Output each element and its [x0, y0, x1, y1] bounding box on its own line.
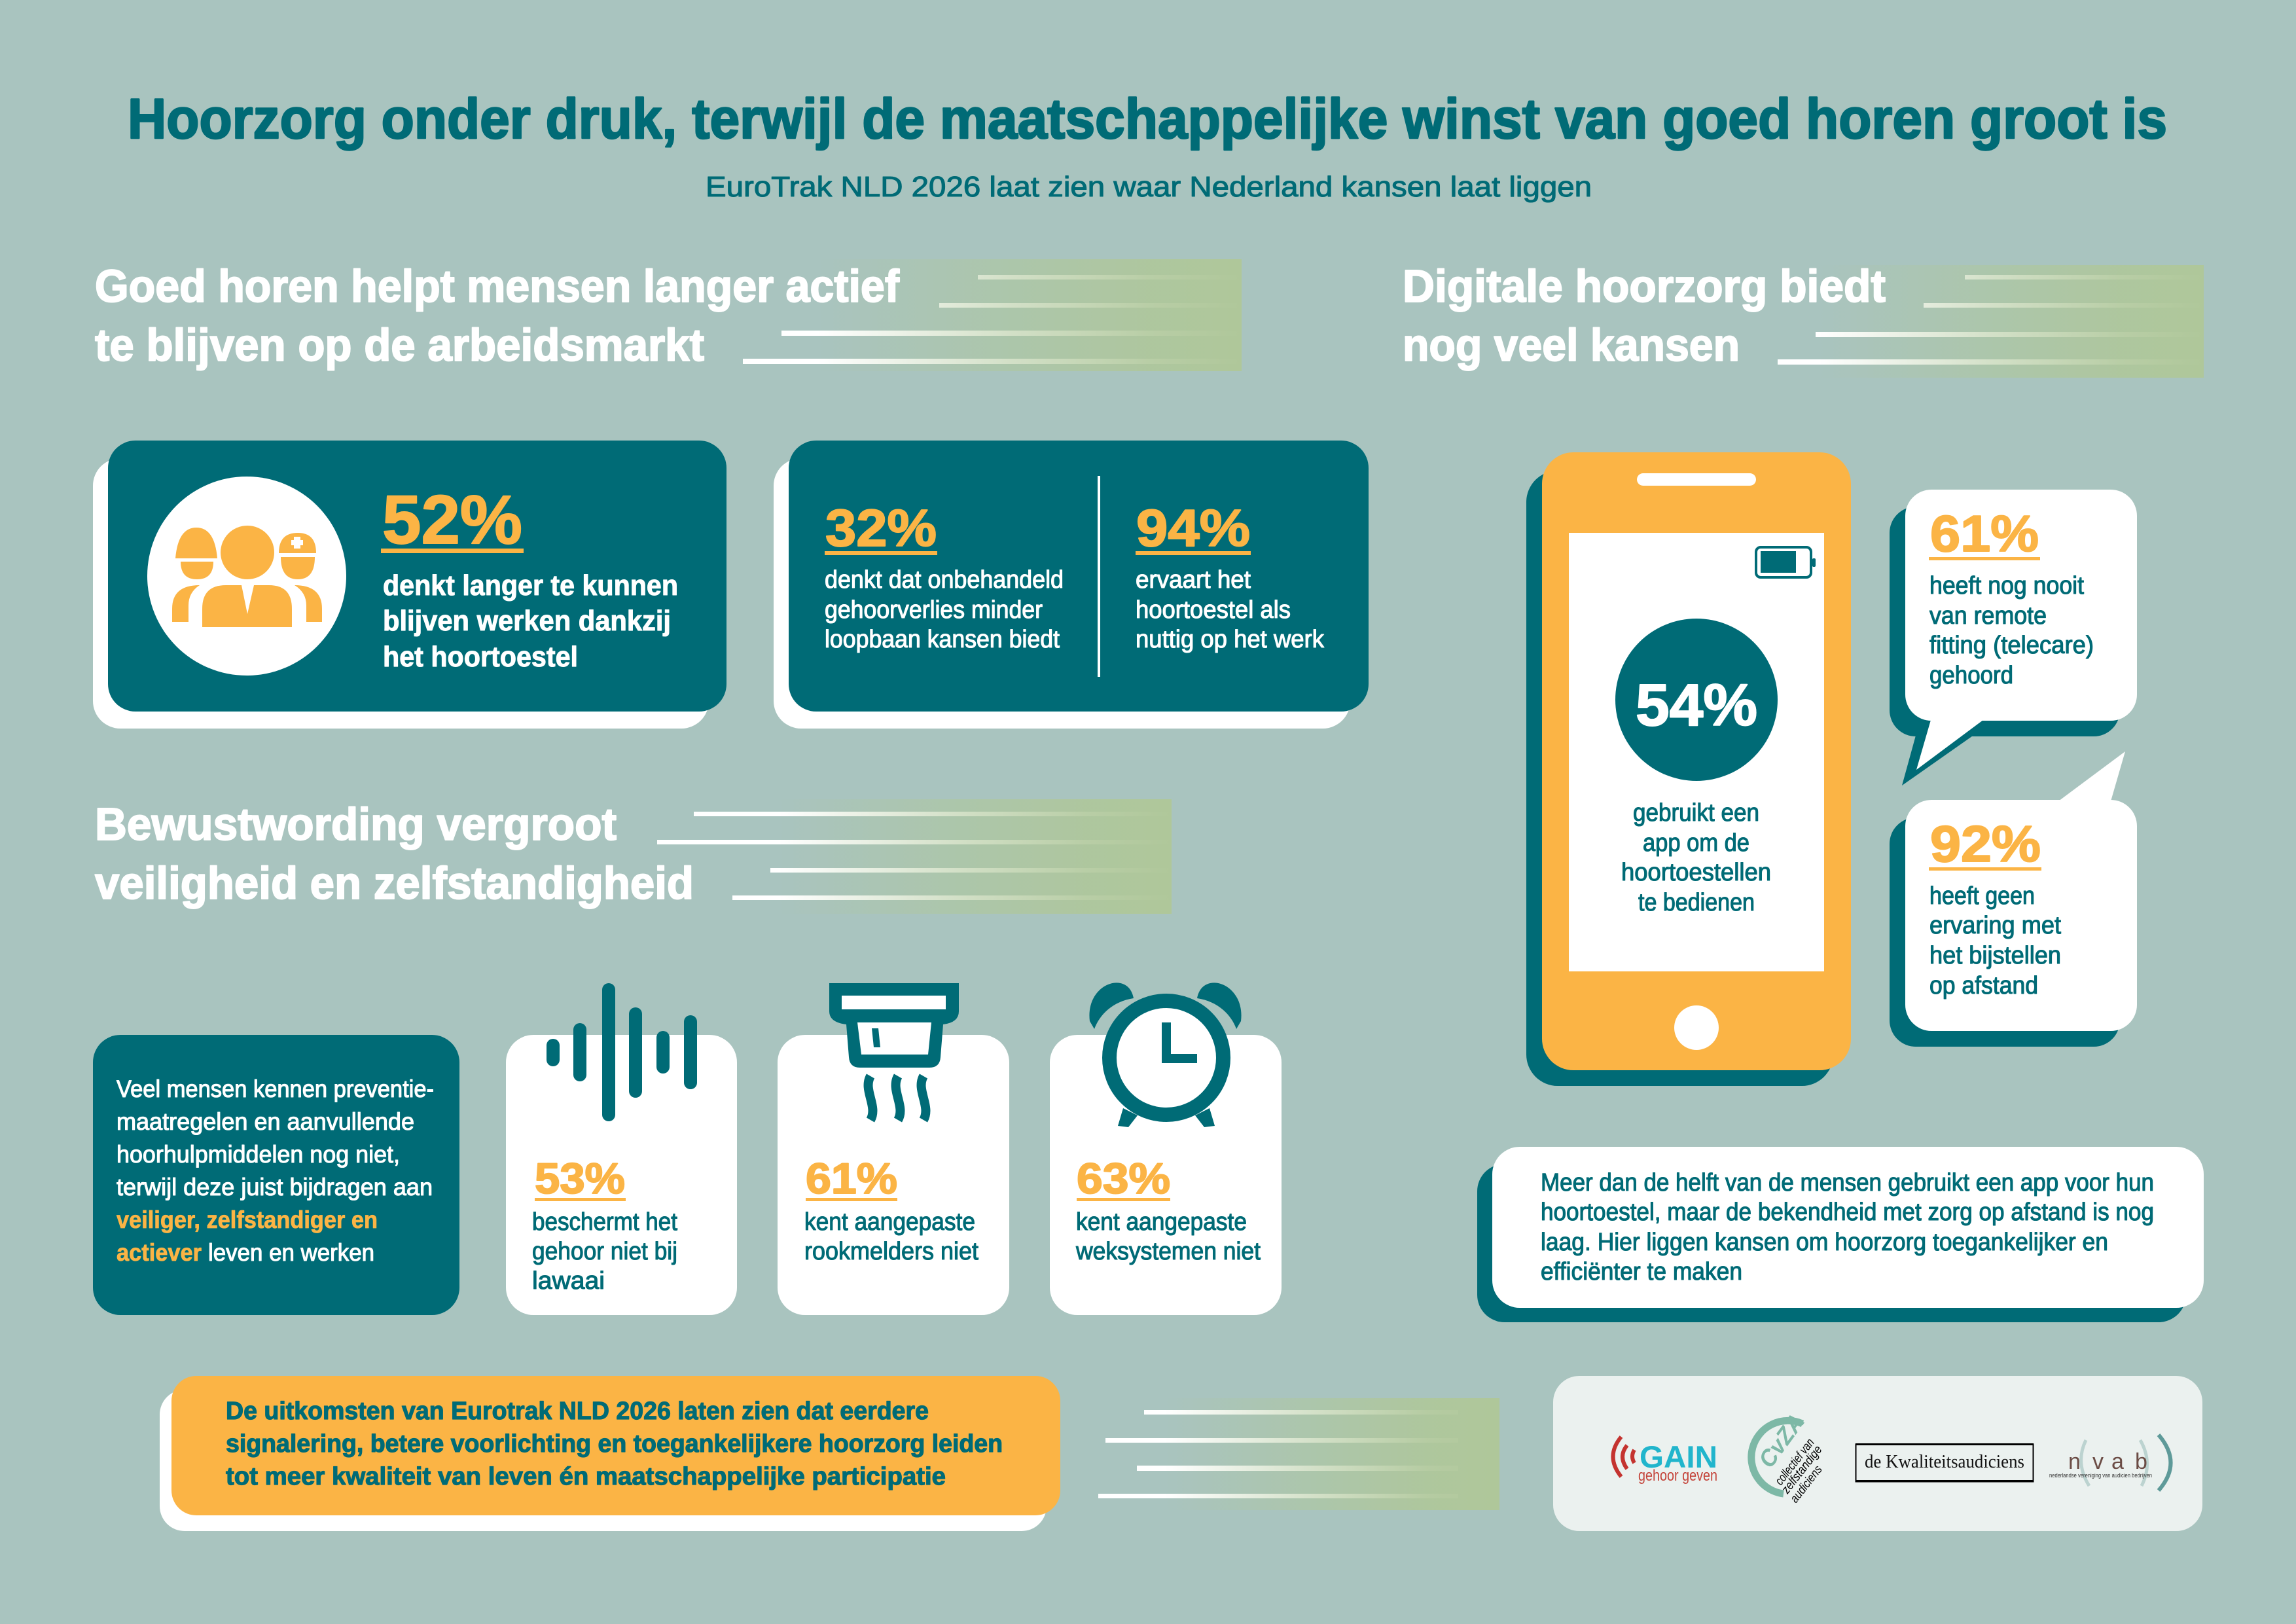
text: beschermt	[532, 1208, 677, 1295]
panel: app samenvatting: efficiënter te maken	[1541, 1258, 1742, 1286]
logo: de Kwaliteitsaudiciens: de Kwaliteitsaudiciens	[1865, 1452, 2024, 1472]
text: bijstellen: ervaring met	[1929, 912, 2061, 939]
text: langer werken: het hoortoestel	[383, 641, 578, 673]
panel: 61% rookmelders	[778, 983, 1009, 1315]
subtitle: EuroTrak NLD 2026 laat zien waar Nederland kansen laat liggen	[706, 171, 1592, 203]
icon: batterij	[1756, 547, 1816, 577]
accent: strepen conclusie	[1098, 1398, 1499, 1510]
heading: digitale hoorzorg	[1403, 261, 2204, 378]
text: app gebruik: gebruikt een	[1633, 799, 1759, 827]
panel: 63% weksystemen	[1050, 983, 1282, 1315]
logo: CvZA: CvZA	[1753, 1409, 1810, 1473]
panel: conclusie: tot meer kwaliteit van leven én maatschappelijke participatie	[226, 1463, 946, 1490]
logo: nvab: n	[2068, 1449, 2081, 1474]
text: app gebruik: app om de	[1643, 829, 1749, 857]
text: rookmelders	[804, 1208, 978, 1265]
panel: app samenvatting: laag. Hier liggen kansen om hoorzorg toegankelijker en	[1541, 1229, 2108, 1256]
stat: 32%: 32%	[825, 499, 937, 557]
stat: 61%: 61%	[806, 1154, 897, 1202]
text: langer werken: denkt langer te kunnen	[383, 569, 678, 602]
title: Hoorzorg onder druk, terwijl de maatschappelijke winst van goed horen groot is	[128, 88, 2167, 151]
text: weksystemen: kent aangepaste	[1076, 1208, 1247, 1236]
logo: CvZA: zelfstandige	[1779, 1443, 1825, 1497]
heading: arbeidsmarkt: Goed horen helpt mensen langer actief	[95, 261, 900, 312]
panel: preventie tekst: hoorhulpmiddelen nog niet,	[117, 1141, 400, 1168]
text: weksystemen	[1075, 1208, 1261, 1265]
speech bubble: 61%	[1890, 490, 2137, 785]
heading: arbeidsmarkt	[95, 259, 1242, 371]
panel: preventie tekst: Veel mensen kennen preventie-	[117, 1075, 434, 1102]
text: bijstellen: het bijstellen	[1929, 942, 2061, 969]
stat: 54%	[1615, 619, 1778, 781]
stat: 92% bubble: 92%	[1930, 815, 2041, 873]
text: remote fitting: van remote	[1929, 602, 2047, 630]
panel: app samenvatting: Meer dan de helft van de mensen gebruikt een app voor hun	[1541, 1169, 2154, 1197]
phone	[1526, 452, 1851, 1086]
panel: 32% en 94%	[774, 441, 1369, 729]
logo: nvab: v	[2092, 1449, 2104, 1474]
panel: app samenvatting: hoortoestel, maar de bekendheid met zorg op afstand is nog	[1541, 1199, 2154, 1226]
stat: 63%: 63%	[1077, 1154, 1170, 1202]
panel: conclusie	[160, 1376, 1060, 1531]
logo: GAIN: gehoor geven	[1638, 1467, 1717, 1485]
text: rookmelders: rookmelders niet	[804, 1238, 978, 1265]
stat: 32%: loopbaan kansen biedt	[825, 626, 1060, 653]
panel: logo's	[1553, 1376, 2202, 1531]
stat: 52%: 52%	[382, 482, 522, 558]
stat: 61% bubble: 61%	[1930, 505, 2039, 562]
text: langer werken: blijven werken dankzij	[383, 605, 671, 637]
text: remote fitting: gehoord	[1929, 662, 2013, 689]
stat: 94%: hoortoestel als	[1136, 596, 1291, 624]
panel: conclusie: signalering, betere voorlichting en toegankelijkere hoorzorg leiden	[226, 1430, 1003, 1458]
heading: arbeidsmarkt: te blijven op de arbeidsmarkt	[95, 319, 704, 370]
text: remote fitting: fitting (telecare)	[1929, 632, 2094, 659]
logo: de Kwaliteitsaudiciens	[1856, 1443, 2034, 1482]
logo: CvZA	[1751, 1409, 1825, 1506]
stat: 94%: ervaart het	[1136, 566, 1251, 594]
panel: preventie tekst: leven en werken	[208, 1239, 374, 1266]
heading: digitale hoorzorg: Digitale hoorzorg biedt	[1403, 261, 1886, 312]
icon: rookmelder	[829, 983, 959, 1120]
panel: preventie tekst	[93, 1035, 459, 1315]
stat: 32%: gehoorverlies minder	[825, 596, 1043, 624]
logo: CvZA: audiciens	[1787, 1463, 1825, 1506]
logo: GAIN: GAIN	[1640, 1439, 1717, 1474]
text: langer werken	[383, 569, 678, 673]
stat: 94%: 94%	[1136, 499, 1250, 557]
stat: 32%	[825, 499, 1064, 653]
text: app gebruik	[1621, 799, 1771, 916]
icon: werkende mensen	[147, 477, 346, 676]
text: beschermt: lawaai	[532, 1267, 605, 1295]
panel: 52% werken	[93, 441, 726, 729]
text: app gebruik: te bedienen	[1638, 889, 1755, 916]
heading: bewustwording	[95, 799, 1172, 914]
panel: preventie tekst: actiever	[117, 1239, 202, 1266]
text: remote fitting	[1929, 572, 2094, 689]
logo: CvZA: collectief van	[1772, 1436, 1818, 1488]
logo: nvab: nederlandse vereniging van audicien bedrijven	[2049, 1472, 2152, 1479]
text: bijstellen	[1929, 882, 2061, 1000]
stat: 94%: nuttig op het werk	[1136, 626, 1325, 653]
icon: geluidsgolf	[547, 983, 697, 1121]
panel: conclusie: De uitkomsten van Eurotrak NLD 2026 laten zien dat eerdere	[226, 1398, 929, 1425]
panel: 53% lawaai	[506, 983, 737, 1315]
stat: 54%: 54%	[1636, 673, 1757, 738]
text: rookmelders: kent aangepaste	[804, 1208, 975, 1236]
text: beschermt: beschermt het	[532, 1208, 677, 1236]
stat: 94%	[1136, 499, 1325, 653]
text: weksystemen: weksystemen niet	[1075, 1238, 1261, 1265]
heading: bewustwording: Bewustwording vergroot	[95, 799, 617, 850]
panel: preventie tekst: maatregelen en aanvullende	[117, 1108, 414, 1135]
stat: 32%: denkt dat onbehandeld	[825, 566, 1064, 594]
text: app gebruik: hoortoestellen	[1621, 859, 1771, 886]
logo: nvab	[2049, 1435, 2170, 1490]
text: remote fitting: heeft nog nooit	[1929, 572, 2084, 600]
heading: digitale hoorzorg: nog veel kansen	[1403, 319, 1740, 370]
panel: preventie tekst: veiliger, zelfstandiger en	[117, 1206, 378, 1233]
logo: nvab: a	[2111, 1449, 2124, 1474]
heading: bewustwording: veiligheid en zelfstandigheid	[95, 857, 694, 909]
text: bijstellen: op afstand	[1929, 972, 2038, 1000]
text: beschermt: gehoor niet bij	[532, 1238, 677, 1265]
panel: preventie tekst: terwijl deze juist bijdragen aan	[117, 1174, 433, 1200]
panel: app samenvatting	[1477, 1147, 2204, 1322]
logo: nvab: b	[2135, 1449, 2147, 1474]
icon: wekker	[1089, 983, 1242, 1127]
stat: 53%: 53%	[535, 1154, 625, 1202]
speech bubble: 92%	[1890, 751, 2137, 1047]
logo: GAIN	[1613, 1437, 1717, 1485]
text: bijstellen: heeft geen	[1929, 882, 2035, 910]
